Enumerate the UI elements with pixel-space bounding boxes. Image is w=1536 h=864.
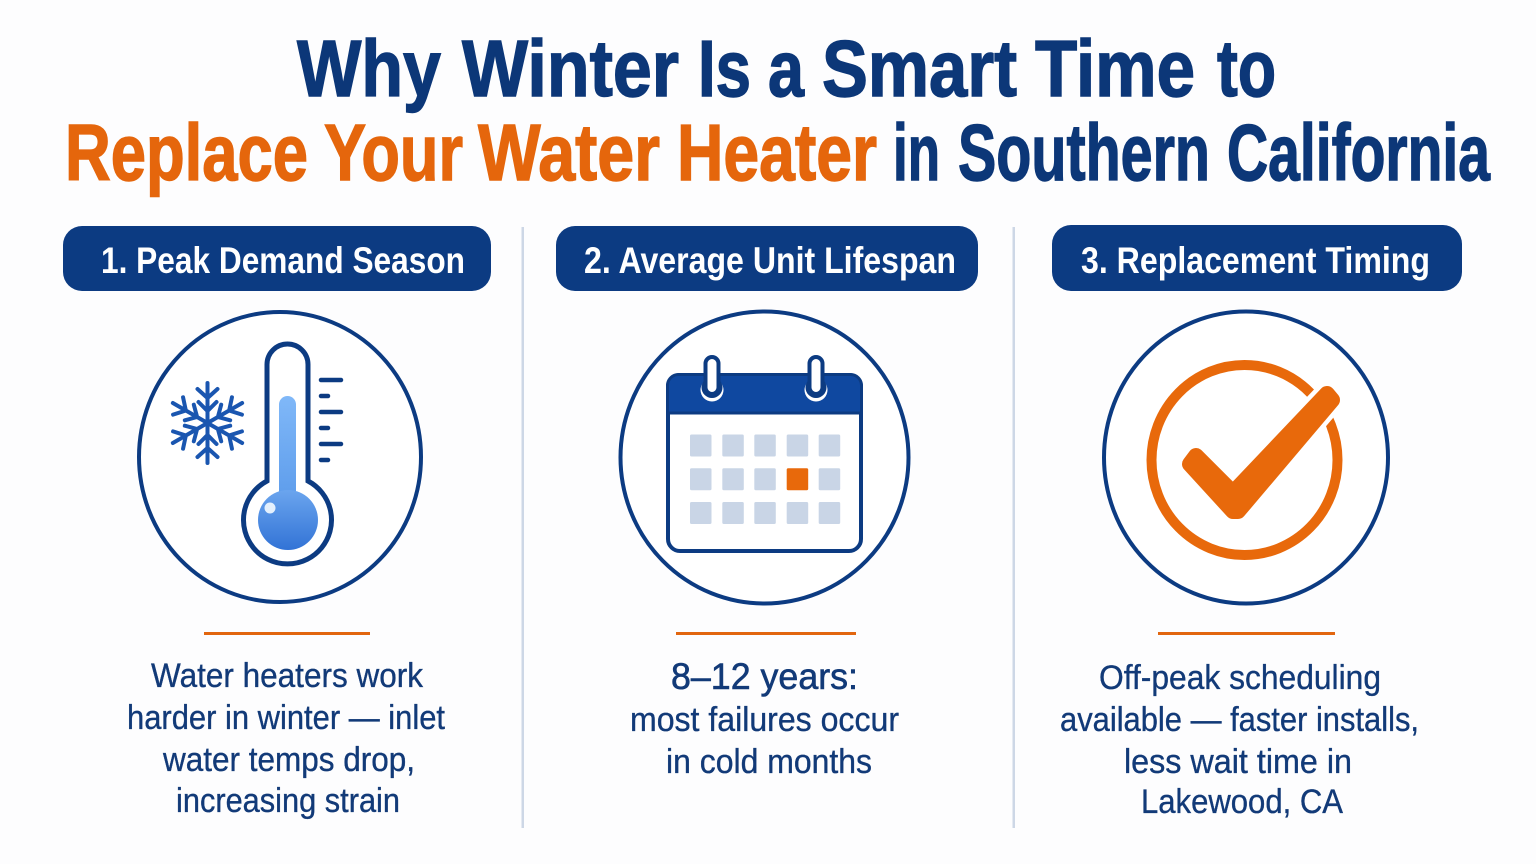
check gap <box>1233 394 1332 511</box>
body text 2: in cold months <box>666 743 872 781</box>
body text 3: Lakewood, CA <box>1141 783 1343 821</box>
title line 2 highlight: Your <box>324 108 463 197</box>
title line 2 highlight: Replace <box>65 108 308 197</box>
body text 1: increasing strain <box>176 782 400 820</box>
orange ring <box>1152 365 1338 555</box>
body text 3: Off-peak scheduling <box>1099 659 1381 697</box>
panel: average unit lifespan <box>556 226 978 781</box>
title line 1: to <box>1217 24 1276 113</box>
heading pill 3 <box>1052 225 1462 291</box>
panel: replacement timing <box>1052 225 1462 821</box>
body text 2 <box>630 656 899 781</box>
body text 2: 8–12 years: <box>671 656 858 697</box>
body text 3 <box>1060 659 1419 821</box>
heading pill 3: 3. Replacement Timing <box>1081 240 1430 281</box>
icon: check mark in ring <box>1104 312 1388 604</box>
heading pill 2 <box>556 226 978 291</box>
title line 2 remainder: in <box>893 108 940 197</box>
body text 1: Water heaters work <box>151 657 424 695</box>
thermometer ticks <box>321 380 341 460</box>
panel: peak demand season <box>63 226 491 820</box>
body text 2: most failures occur <box>630 701 899 739</box>
title line 1 <box>297 24 1276 113</box>
title line 2 remainder <box>893 108 1490 197</box>
check mark <box>1190 394 1332 511</box>
title line 1: Smart <box>822 24 1017 113</box>
title line 1: Time <box>1035 24 1195 113</box>
calendar body <box>668 375 861 551</box>
title <box>65 24 1490 197</box>
body text 1: harder in winter — inlet <box>127 699 445 737</box>
calendar day grid <box>690 434 840 524</box>
calendar rings <box>700 357 828 402</box>
heading pill 1: 1. Peak Demand Season <box>101 240 465 281</box>
title line 2 highlight: Heater <box>677 108 877 197</box>
title line 2 remainder: Southern <box>958 108 1210 197</box>
title line 1: a <box>768 24 804 113</box>
icon: calendar <box>620 312 908 604</box>
title line 1: Why <box>297 24 441 113</box>
body text 1: water temps drop, <box>162 741 415 779</box>
body text 3: less wait time in <box>1124 743 1352 781</box>
calendar header <box>668 374 862 413</box>
thermometer bulb <box>258 490 318 550</box>
title line 2 highlight <box>65 108 877 197</box>
heading pill 1 <box>63 226 491 291</box>
icon: thermometer and snowflake <box>139 312 421 602</box>
body text 1 <box>127 657 445 820</box>
thermometer column <box>279 396 296 501</box>
title line 1: Winter <box>462 24 679 113</box>
icon: snowflake <box>168 383 247 463</box>
thermometer outline <box>243 344 332 564</box>
title line 2 highlight: Water <box>478 108 660 197</box>
title line 1: Is <box>698 24 751 113</box>
body text 3: available — faster installs, <box>1060 701 1419 739</box>
heading pill 2: 2. Average Unit Lifespan <box>584 240 956 281</box>
